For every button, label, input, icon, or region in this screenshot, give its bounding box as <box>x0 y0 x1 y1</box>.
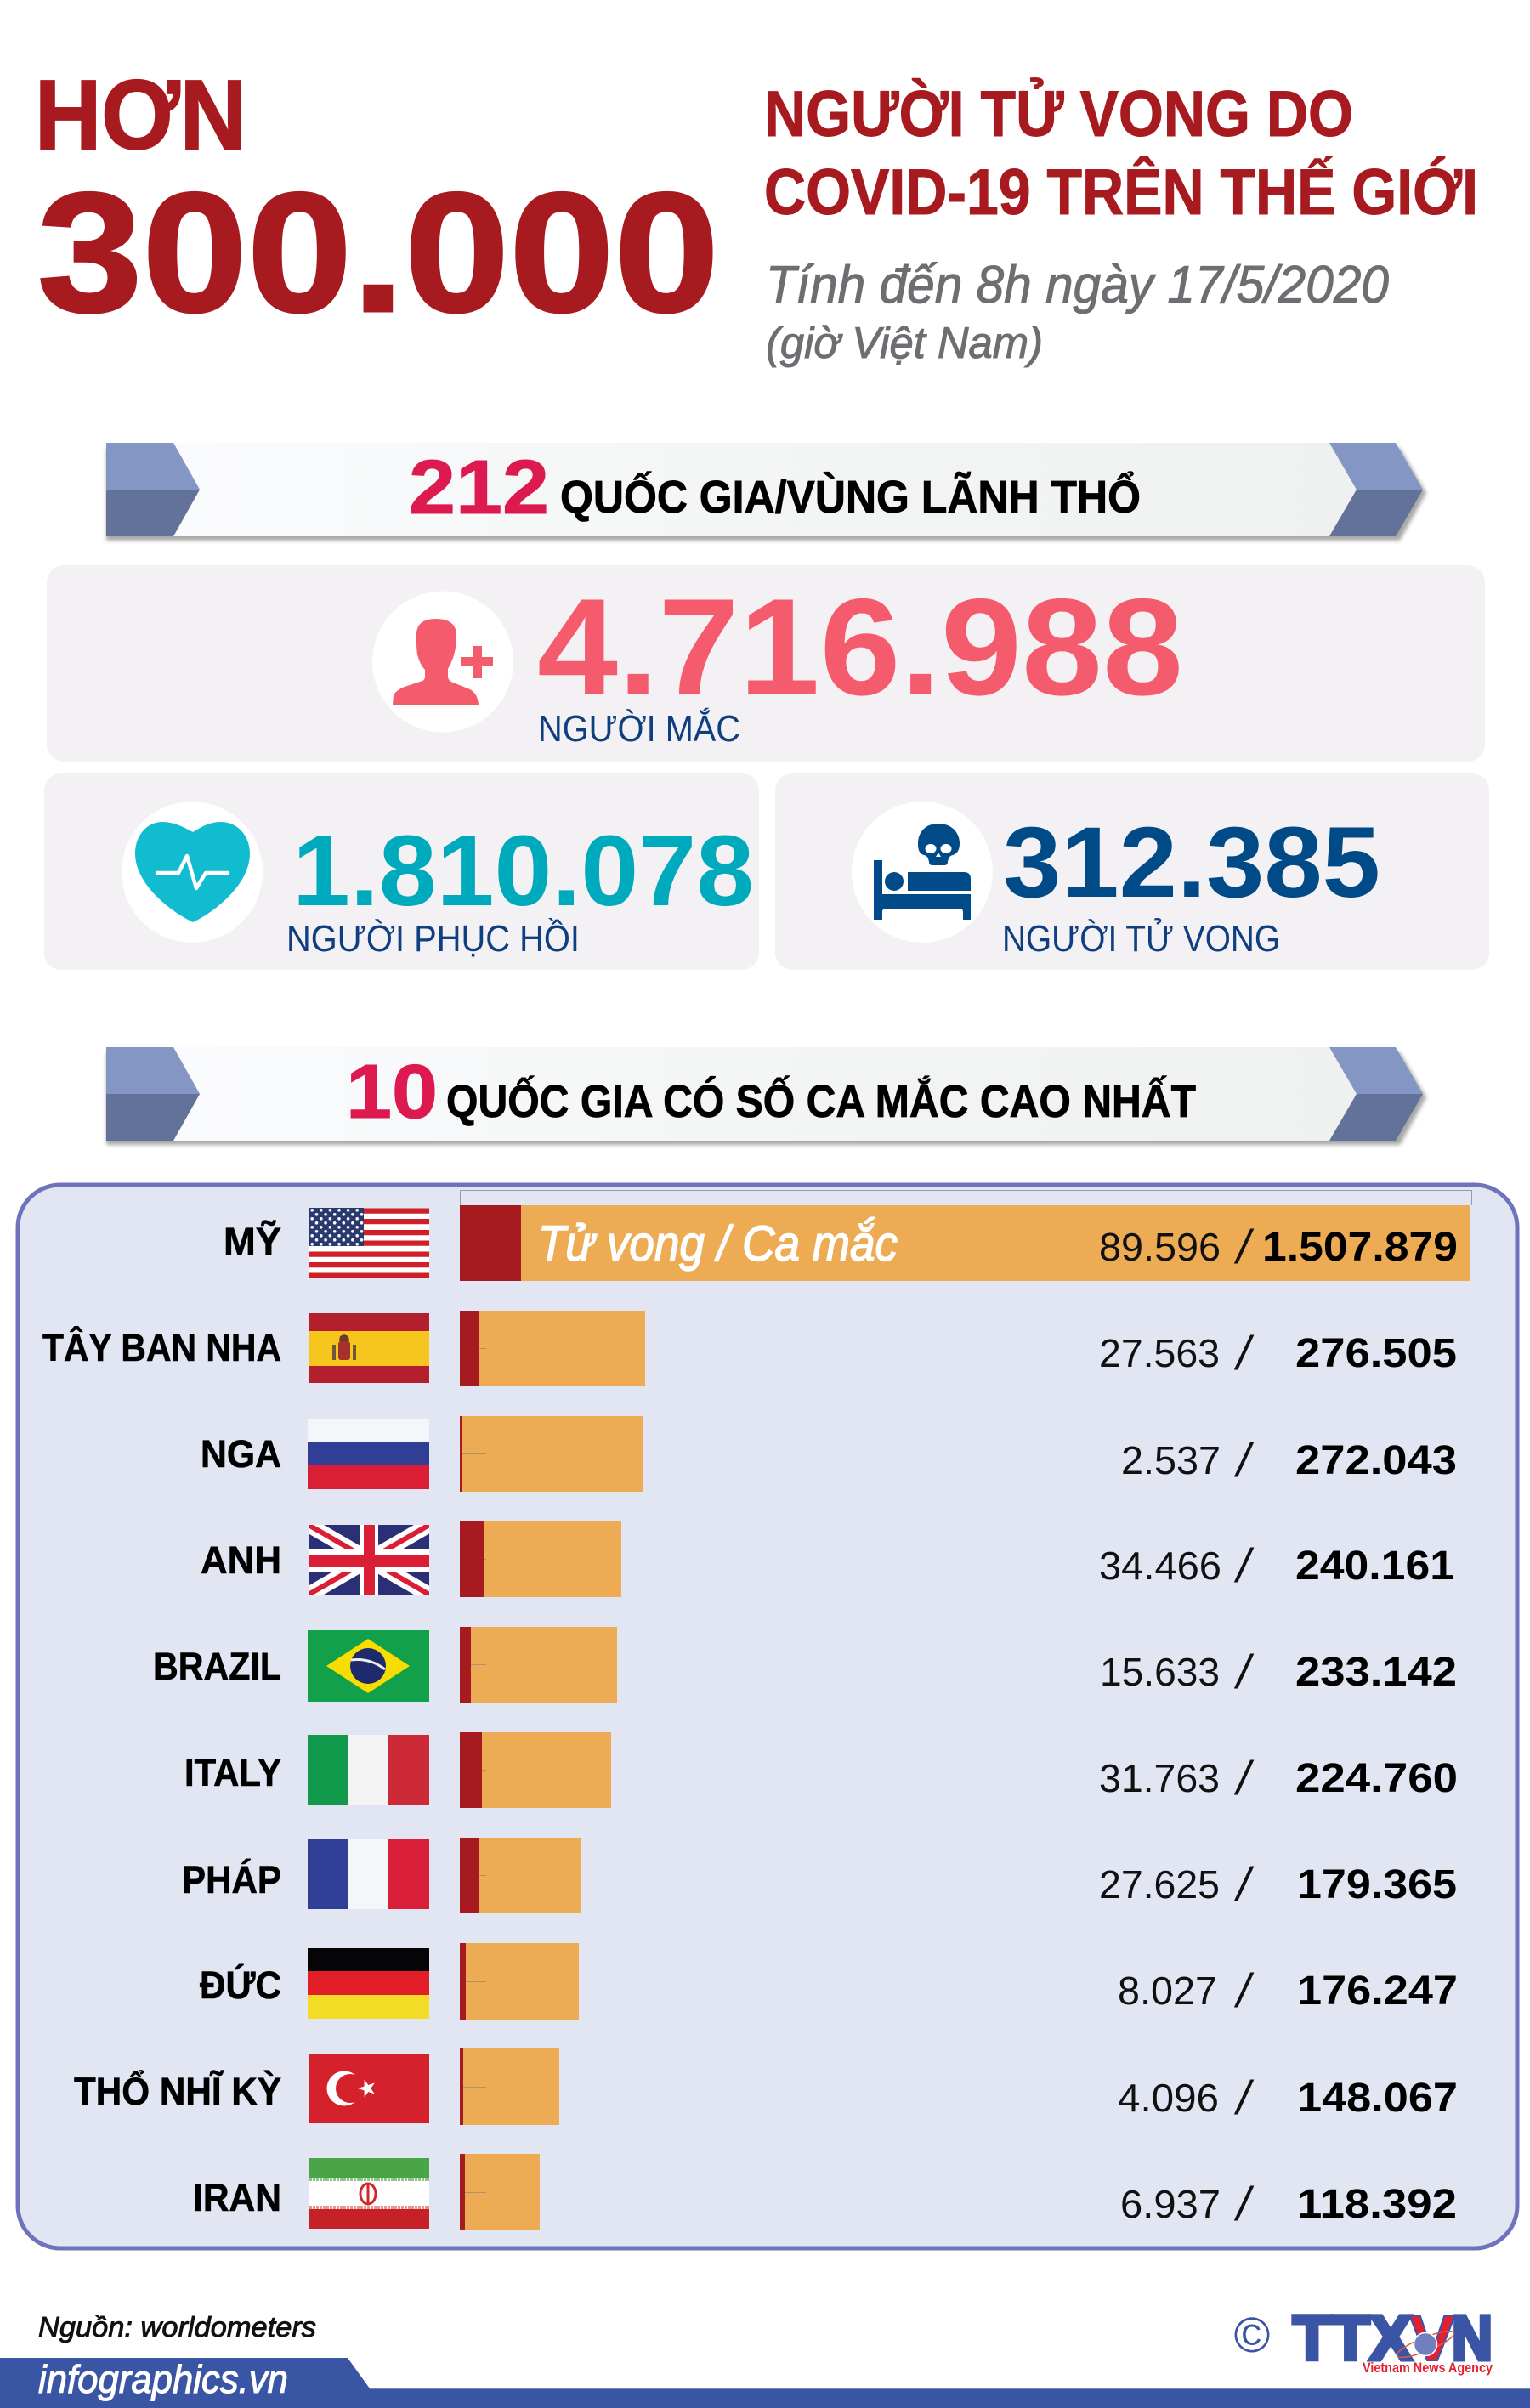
bar <box>460 2048 559 2125</box>
flag: Germany <box>308 1948 429 2019</box>
values: 89.596 <box>1099 1225 1221 1269</box>
values: 148.067 <box>1297 2076 1458 2121</box>
flag: Italy <box>308 1735 429 1805</box>
label: TÂY BAN NHA <box>42 1326 281 1369</box>
values <box>1118 1963 1458 2017</box>
values: / <box>1233 1751 1255 1805</box>
bar <box>460 1838 581 1913</box>
values: / <box>1233 2071 1255 2124</box>
number: cases: 4.716.988 <box>537 570 1183 724</box>
label: ĐỨC <box>200 1963 281 2007</box>
values: / <box>1233 1538 1255 1592</box>
panel: recovered <box>44 773 759 970</box>
values: / <box>1233 1963 1255 2017</box>
values <box>1099 1326 1457 1380</box>
row: Mỹ <box>224 1205 1470 1281</box>
footer site name: infographics.vn <box>38 2357 288 2401</box>
values: 276.505 <box>1295 1331 1457 1376</box>
values <box>1121 1433 1457 1487</box>
row: Iran <box>193 2154 1457 2230</box>
label: BRAZIL <box>153 1645 281 1688</box>
heading: HƠN: HƠN <box>35 59 246 170</box>
values: 272.043 <box>1295 1438 1457 1483</box>
banner text: QUỐC GIA/VÙNG LÃNH THỔ <box>560 472 1141 523</box>
panel: deaths <box>775 773 1489 970</box>
row: Nga <box>201 1416 1457 1492</box>
logo tagline: Vietnam News Agency <box>1363 2360 1493 2376</box>
flag: Russia <box>308 1419 429 1489</box>
values: / <box>1233 1326 1255 1380</box>
label: ANH <box>201 1538 281 1582</box>
values: 8.027 <box>1118 1969 1217 2013</box>
values: 224.760 <box>1295 1756 1458 1801</box>
label: recovered: NGƯỜI PHỤC HỒI <box>286 917 580 960</box>
values: 6.937 <box>1120 2182 1221 2226</box>
icon: skull and bed <box>852 802 993 943</box>
values: / <box>1233 1220 1255 1273</box>
values: / <box>1233 1433 1255 1487</box>
row: Đức <box>200 1943 1458 2020</box>
label: PHÁP <box>182 1858 281 1901</box>
values <box>1099 1751 1458 1805</box>
label: THỔ NHĨ KỲ <box>74 2070 281 2113</box>
values: 2.537 <box>1121 1438 1221 1482</box>
banner number: 10 <box>346 1050 438 1135</box>
values: 179.365 <box>1297 1862 1457 1907</box>
row: Italy <box>184 1732 1458 1808</box>
label: deaths: NGƯỜI TỬ VONG <box>1002 916 1280 960</box>
bar <box>460 1943 579 2020</box>
subheading: date: Tính đến 8h ngày 17/5/2020 <box>766 256 1389 314</box>
values <box>1099 1857 1457 1911</box>
values: / <box>1233 1645 1255 1698</box>
heading: deaths line 1: NGƯỜI TỬ VONG DO <box>764 78 1353 150</box>
values <box>1118 2071 1458 2124</box>
banner: top 10 countries <box>106 1047 1426 1145</box>
values: 31.763 <box>1099 1756 1220 1800</box>
label: cases: NGƯỜI MẮC <box>538 707 740 750</box>
bar <box>460 1521 621 1597</box>
values <box>1099 1538 1454 1592</box>
values <box>1120 2177 1457 2230</box>
values: 27.563 <box>1099 1331 1220 1375</box>
values: 34.466 <box>1099 1544 1221 1588</box>
flag: UK <box>309 1525 429 1595</box>
banner: 212 countries <box>106 443 1426 541</box>
number: recovered: 1.810.078 <box>292 815 754 927</box>
flag: Turkey <box>309 2054 429 2123</box>
source text: Nguồn: worldometers <box>38 2311 316 2343</box>
row: Brazil <box>153 1627 1457 1703</box>
label: IRAN <box>193 2176 281 2219</box>
bar <box>460 2154 540 2230</box>
row: Tây Ban Nha <box>42 1311 1457 1386</box>
bar <box>460 1627 617 1703</box>
label: MỸ <box>224 1220 281 1263</box>
values: 118.392 <box>1297 2182 1457 2227</box>
label: ITALY <box>184 1751 281 1794</box>
logo letter N: N <box>1452 2303 1493 2373</box>
heading: 300.000: 300.000 <box>37 158 719 348</box>
row: Thổ Nhĩ Kỳ <box>74 2048 1458 2125</box>
logo: copyright and TTXVN <box>1234 2303 1493 2376</box>
values: 4.096 <box>1118 2076 1219 2120</box>
copyright mark: © <box>1234 2308 1270 2363</box>
logo globe <box>1395 2326 1456 2362</box>
logo letter V: V <box>1409 2303 1455 2375</box>
footer bar <box>0 2357 1530 2408</box>
bar <box>460 1732 611 1808</box>
icon: heart pulse <box>122 802 263 943</box>
values: 1.507.879 <box>1262 1225 1458 1270</box>
legend: Tử vong / Ca mắc <box>538 1216 898 1272</box>
flag: Iran <box>309 2158 429 2229</box>
values: 176.247 <box>1297 1969 1458 2014</box>
row: Anh <box>201 1521 1454 1597</box>
bar <box>460 1416 643 1492</box>
values: / <box>1233 1857 1255 1911</box>
logo letters TTX: TTX <box>1293 2303 1412 2373</box>
banner text: QUỐC GIA CÓ SỐ CA MẮC CAO NHẤT <box>446 1075 1196 1127</box>
values <box>1100 1645 1457 1698</box>
values <box>1099 1220 1458 1273</box>
values: 15.633 <box>1100 1650 1220 1694</box>
values: 27.625 <box>1099 1862 1220 1907</box>
subheading: timezone: (giờ Việt Nam) <box>766 319 1043 368</box>
values: / <box>1233 2177 1255 2230</box>
header: headline <box>35 59 1478 368</box>
panel: confirmed cases <box>47 565 1485 762</box>
bar <box>460 1205 1470 1281</box>
number: deaths: 312.385 <box>1003 807 1380 919</box>
flag: Brazil <box>308 1630 429 1702</box>
row: Pháp <box>182 1838 1457 1913</box>
values: 233.142 <box>1295 1650 1457 1695</box>
banner number: 212 <box>409 445 549 530</box>
bar <box>460 1311 645 1386</box>
label: NGA <box>201 1432 281 1476</box>
flag: France <box>308 1839 429 1909</box>
values: 240.161 <box>1295 1544 1454 1589</box>
flag: USA <box>309 1208 429 1278</box>
flag: Spain <box>309 1313 429 1383</box>
panel: top 10 chart <box>18 1185 1517 2248</box>
icon: person plus <box>372 592 513 733</box>
